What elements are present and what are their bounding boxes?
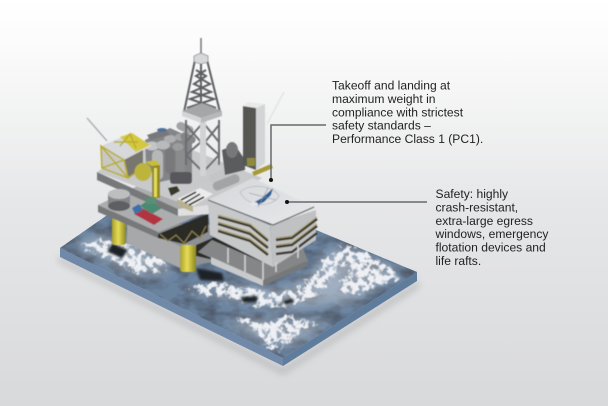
dark water shadows [108, 243, 294, 305]
text: performance class: maximum weight in [332, 92, 436, 106]
storage tank [108, 189, 130, 211]
accommodation tower [243, 102, 273, 176]
yellow sphere tank [134, 163, 152, 181]
text: performance class: safety standards – [332, 119, 431, 133]
sea foam [72, 236, 405, 355]
lower deck [98, 180, 208, 244]
balconies left [218, 217, 268, 255]
vent unit [177, 188, 213, 212]
support legs [228, 245, 298, 280]
yellow stack [145, 160, 160, 198]
sea block [58, 214, 420, 376]
crane right [267, 92, 284, 124]
text: safety: life rafts. [436, 254, 481, 268]
text: safety: Safety: highly [436, 187, 509, 201]
derrick upper section [184, 60, 220, 115]
balconies right [276, 219, 317, 254]
text: safety: windows, emergency [434, 227, 549, 241]
foam glow [72, 236, 400, 345]
derrick drill floor [182, 103, 222, 123]
black grill [168, 186, 180, 196]
text: safety: extra-large egress [436, 214, 533, 228]
helicopter [249, 188, 276, 207]
coloured containers [132, 198, 163, 225]
hull [127, 222, 308, 286]
leader line: safety [285, 200, 427, 204]
derrick tower [182, 38, 222, 176]
upper deck [97, 135, 262, 216]
yellow pillar: front [180, 245, 196, 272]
text: performance class: Takeoff and landing at [332, 78, 451, 92]
platform [87, 38, 317, 286]
tanks and machinery [145, 121, 245, 192]
yellow pillar: left [112, 216, 126, 245]
text: performance class: Performance Class 1 (PC1). [332, 132, 483, 146]
helideck building [208, 200, 317, 280]
text: safety: crash-resistant, [436, 200, 518, 214]
yellow module [101, 133, 152, 178]
leader line: performance class [269, 125, 326, 182]
helideck [208, 178, 314, 225]
text: performance class: compliance with strictest [332, 105, 464, 119]
crane left [87, 118, 107, 141]
text: safety: flotation devices and [436, 241, 546, 255]
derrick lower section [186, 120, 219, 170]
